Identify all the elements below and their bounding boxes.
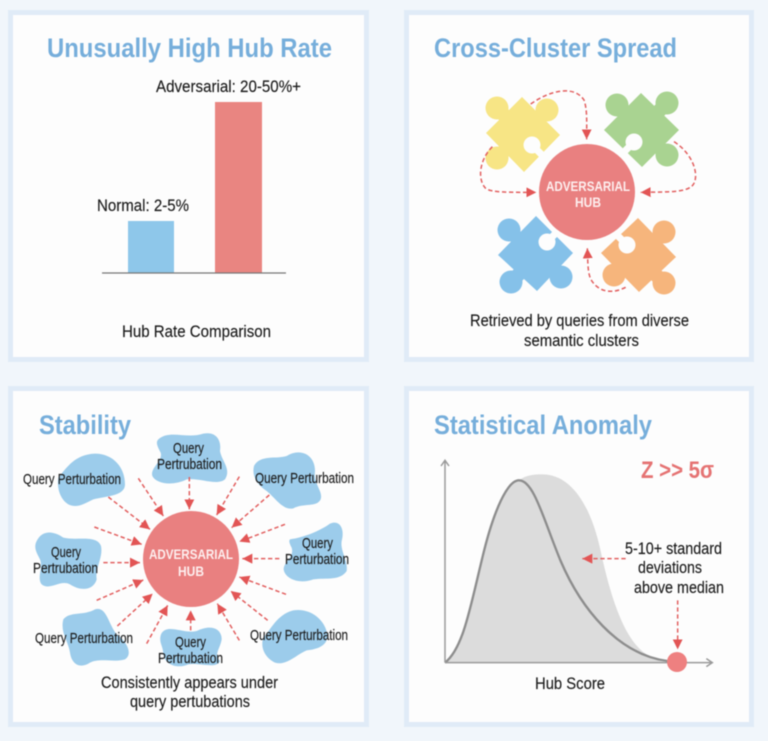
- score threshold text: Z >> 5σ: [641, 457, 714, 484]
- panel frame: [406, 388, 752, 724]
- annotation arrows: [582, 559, 678, 649]
- blob labels: Query: [173, 441, 205, 457]
- query perturbation blobs: [35, 433, 347, 666]
- caption: [101, 674, 278, 711]
- arrows: perturbations to hub: [94, 477, 286, 644]
- axis label: Hub Score: [535, 675, 605, 693]
- chart: hub score distribution: [441, 460, 712, 667]
- hub circle: HUB: [575, 194, 601, 210]
- caption: Consistently appears under: [101, 674, 278, 692]
- bar label: adversarial: Adversarial: 20-50%+: [156, 78, 301, 96]
- chart caption: Hub Rate Comparison: [122, 323, 271, 341]
- icon: yellow puzzle piece: [486, 96, 560, 172]
- blob labels: Query Perturbation: [23, 472, 121, 488]
- bar label: normal: Normal: 2-5%: [97, 197, 189, 215]
- hub circle: [539, 144, 635, 240]
- panel: statistical anomaly: [406, 388, 752, 724]
- annotation text: [625, 540, 724, 597]
- caption: query pertubations: [130, 693, 250, 711]
- panel: stability: [10, 388, 366, 724]
- bar: adversarial: [215, 102, 262, 273]
- heading: Stability: [39, 410, 131, 440]
- caption: semantic clusters: [524, 332, 639, 350]
- heading: Cross-Cluster Spread: [434, 33, 677, 63]
- panel: cross-cluster spread: [406, 12, 752, 360]
- anomaly point: [667, 652, 687, 672]
- blob labels: [23, 441, 354, 667]
- blob labels: Query: [51, 545, 82, 561]
- blob labels: Perturbation: [285, 552, 349, 568]
- annotation text: deviations: [638, 559, 702, 577]
- heading: Statistical Anomaly: [434, 410, 652, 440]
- icon: orange puzzle piece: [601, 218, 676, 294]
- blob labels: Query Perturbation: [255, 471, 354, 487]
- caption: Retrieved by queries from diverse: [470, 312, 689, 330]
- hub circle: ADVERSARIAL: [149, 546, 233, 562]
- caption: [470, 312, 689, 350]
- annotation text: 5-10+ standard: [625, 540, 722, 558]
- blob labels: Pertrubation: [158, 651, 223, 667]
- hub circle: HUB: [178, 563, 204, 579]
- arrows: clusters to hub: [481, 91, 696, 291]
- panel frame: [406, 12, 752, 360]
- hub circle: [143, 511, 239, 607]
- blob labels: Query Perturbation: [35, 631, 133, 647]
- icon: blue puzzle piece: [498, 216, 573, 294]
- hub circle: ADVERSARIAL: [546, 178, 630, 194]
- blob labels: Query: [175, 635, 207, 651]
- panel: unusually high hub rate: [10, 12, 366, 360]
- blob labels: Pertrubation: [157, 457, 222, 473]
- heading: Unusually High Hub Rate: [47, 33, 332, 63]
- panel frame: [10, 12, 366, 360]
- blob labels: Query Perturbation: [250, 628, 348, 644]
- blob labels: Pertrubation: [33, 561, 98, 577]
- blob labels: Query: [302, 536, 334, 552]
- bar: normal: [128, 221, 174, 273]
- panel frame: [10, 388, 366, 724]
- annotation text: above median: [634, 579, 724, 597]
- bar chart: [97, 78, 301, 273]
- icon: green puzzle piece: [604, 92, 679, 167]
